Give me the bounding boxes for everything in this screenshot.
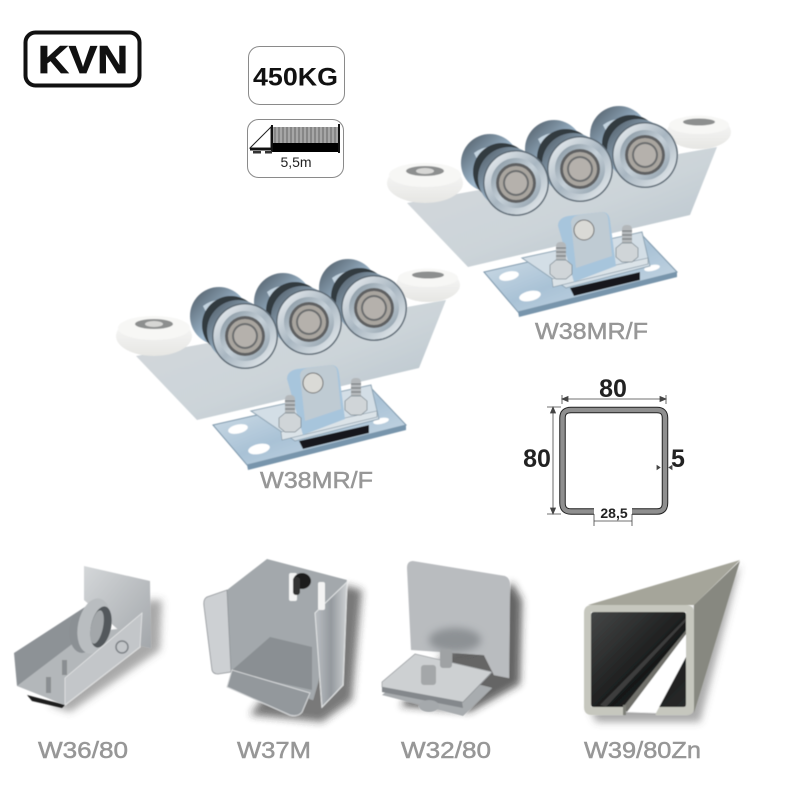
diagram: track profile cross-section: 80 [599, 375, 627, 403]
badge: load capacity 450KG [248, 46, 344, 104]
badge: load capacity 450KG: 450KG [253, 64, 338, 92]
product: carriage W38MR/F, lower left [116, 259, 460, 470]
label: upper carriage: W38MR/F [535, 318, 648, 344]
label: W36/80: W36/80 [38, 737, 128, 763]
logo: KVN: KVN [38, 39, 128, 82]
diagram: track profile cross-section: 5 [671, 445, 685, 473]
label: W32/80: W32/80 [401, 737, 491, 763]
product: W37M end cap [204, 559, 362, 722]
label: W37M: W37M [237, 737, 311, 763]
diagram: track profile cross-section [523, 375, 685, 526]
diagram: track profile cross-section: 28,5 [600, 505, 628, 521]
product: W39/80Zn track section [584, 560, 740, 722]
product: W32/80 stopper plate [382, 561, 522, 716]
badge: gate length 5,5m [248, 120, 344, 178]
diagram: track profile cross-section: 80 [523, 445, 551, 473]
label: lower carriage: W38MR/F [260, 467, 373, 493]
logo: KVN [26, 32, 140, 86]
product: carriage W38MR/F, upper right [387, 106, 731, 317]
badge: gate length 5,5m: 5,5m [280, 154, 312, 170]
label: W39/80Zn: W39/80Zn [584, 737, 701, 763]
product: W36/80 end cap with wheel [14, 566, 162, 712]
